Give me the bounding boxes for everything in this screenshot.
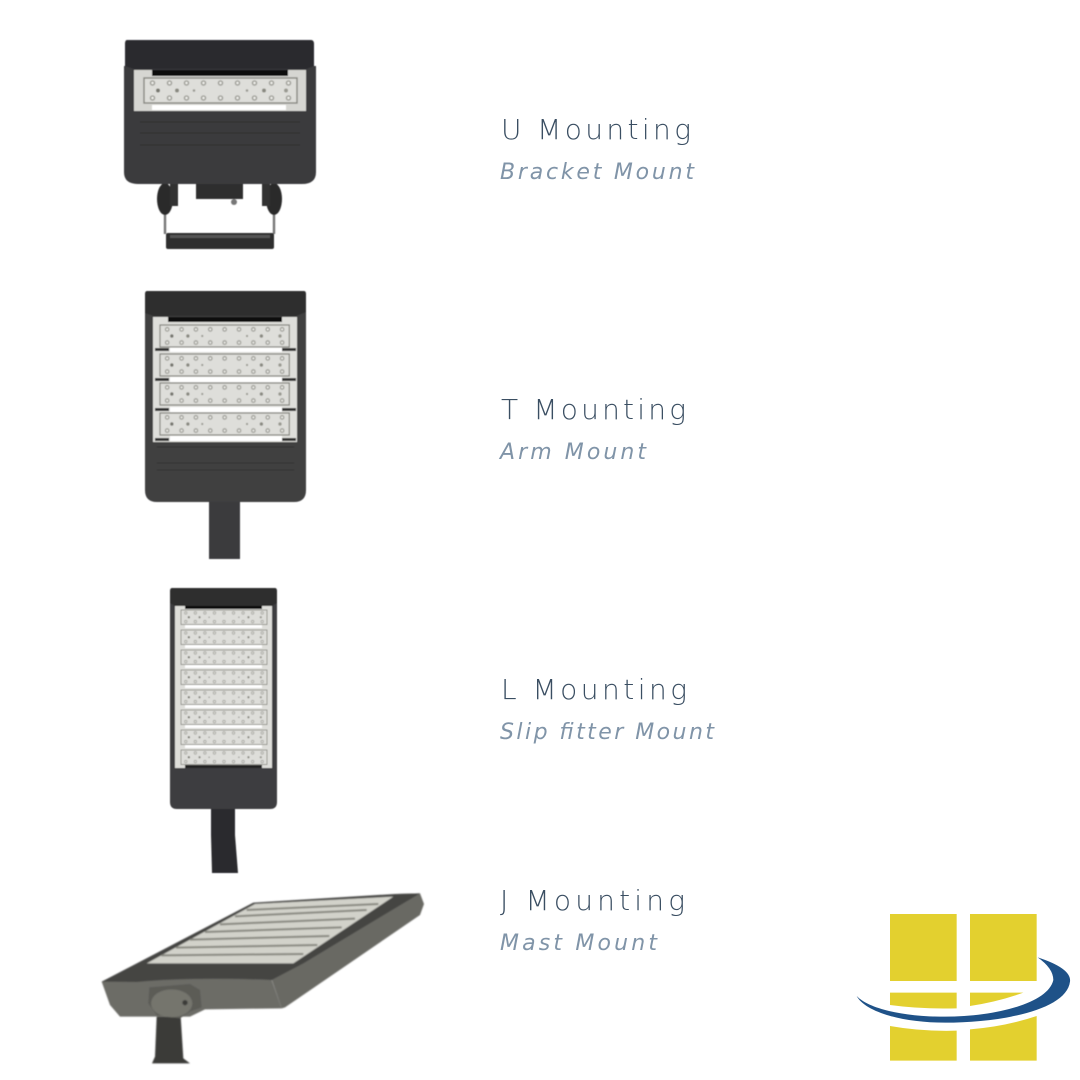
label: L Mounting: L Mounting xyxy=(501,673,687,706)
J lamp mounting knuckle xyxy=(148,984,202,1018)
L lamp LED window xyxy=(175,606,272,768)
label: U Mounting: U Mounting xyxy=(501,113,691,146)
label: U Mounting: Bracket Mount xyxy=(500,160,695,185)
label: L Mounting xyxy=(500,673,715,745)
T lamp vents xyxy=(157,447,294,470)
fixture: U mounting lamp xyxy=(124,40,316,249)
T lamp top cap xyxy=(145,291,306,316)
U lamp vents xyxy=(140,111,300,145)
U lamp LED window xyxy=(134,70,306,111)
L lamp body xyxy=(170,603,277,809)
label: J Mounting: Mast Mount xyxy=(500,931,658,956)
label: J Mounting xyxy=(500,884,685,956)
logo: yellow window panes xyxy=(890,914,1037,1061)
T lamp pole xyxy=(209,502,240,559)
logo: blue swoosh xyxy=(857,957,1070,1023)
T lamp body xyxy=(145,312,306,502)
label: L Mounting: Slip fitter Mount xyxy=(500,720,715,745)
fixture: J mounting lamp xyxy=(102,893,424,1063)
fixture: T mounting lamp xyxy=(145,291,306,559)
label: T Mounting: T Mounting xyxy=(501,393,686,426)
fixture: L mounting lamp xyxy=(170,588,277,873)
J lamp post xyxy=(152,1017,190,1063)
label: U Mounting xyxy=(500,113,695,185)
label: T Mounting: Arm Mount xyxy=(498,440,647,465)
J lamp top rim xyxy=(102,893,420,982)
J lamp right side face xyxy=(272,893,424,1008)
T lamp LED window xyxy=(153,317,297,442)
label: T Mounting xyxy=(498,393,686,465)
logo xyxy=(857,914,1070,1061)
L lamp top cap xyxy=(170,588,277,606)
U lamp bracket arm and handle xyxy=(157,180,282,249)
J lamp front and side faces xyxy=(102,963,293,1017)
L lamp pole xyxy=(211,809,238,873)
label: J Mounting: J Mounting xyxy=(500,884,685,917)
J lamp LED strips xyxy=(147,897,393,963)
U lamp top cap xyxy=(125,40,314,69)
U lamp body xyxy=(124,66,316,184)
